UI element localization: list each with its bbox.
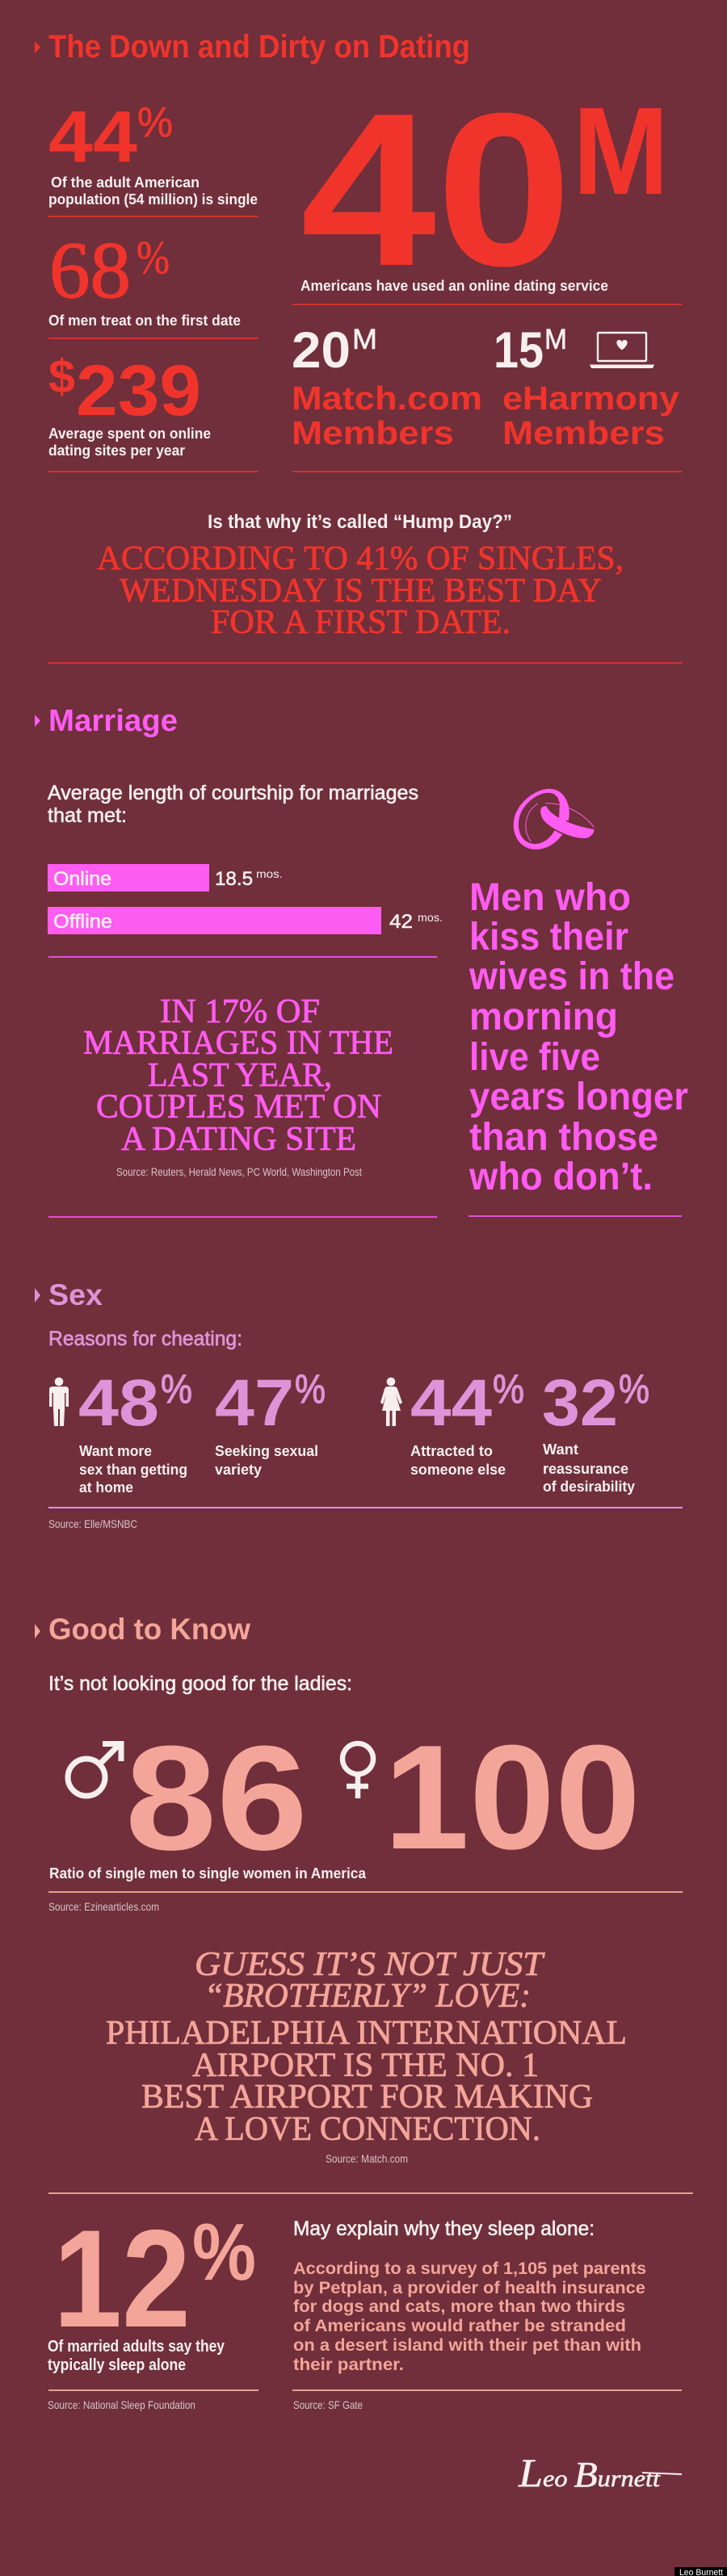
stat: 40 million: M — [573, 82, 669, 220]
stat: 44 percent single: population (54 million) is single — [48, 191, 258, 208]
callout: men who kiss their wives: years longer — [469, 1076, 688, 1118]
callout: wednesday best day: FOR A FIRST DATE. — [211, 604, 511, 641]
stat: 15 million eharmony: eHarmony — [502, 380, 679, 417]
heading: section title: The Down and Dirty on Dating — [48, 29, 470, 65]
stat: 20 million match.com: Match.com — [292, 380, 482, 417]
text: reasons for cheating: Reasons for cheating: — [48, 1328, 242, 1350]
stat: 12 percent sleep alone — [48, 2201, 256, 2374]
text: courtship intro: that met: — [48, 804, 127, 827]
panel: the down and dirty on dating — [35, 29, 683, 664]
callout: hump day question: Is that why it’s called “Hump Day?” — [208, 511, 512, 533]
stat: 12 percent sleep alone: 12 — [53, 2201, 191, 2356]
callout: 17 percent of marriages: A DATING SITE — [121, 1121, 356, 1158]
stat: 47 percent — [215, 1366, 326, 1478]
text: petplan survey: their partner. — [293, 2356, 404, 2374]
heading: good to know: Good to Know — [48, 1613, 250, 1646]
heading: marriage: Marriage — [48, 704, 178, 738]
stat: 47 percent: Seeking sexual — [215, 1443, 318, 1459]
stat: 32 percent: Want — [543, 1441, 578, 1458]
text: petplan survey: of Americans would rather be stranded — [293, 2317, 626, 2335]
arrow: section marker — [35, 715, 40, 727]
bar chart: courtship length: Online — [53, 868, 111, 890]
stat: 15 million eharmony: M — [544, 324, 567, 355]
stat: 100 women: 100 — [384, 1714, 641, 1880]
icon: wedding rings — [514, 789, 595, 850]
source: marriage: Source: Reuters, Herald News, PC World, Washington Post — [116, 1165, 362, 1178]
callout: men who kiss their wives: wives in the — [469, 955, 674, 998]
icon: male symbol — [68, 1744, 121, 1796]
stat: 44 percent single: % — [137, 99, 173, 146]
stat: 40 million: 40 — [300, 69, 572, 312]
callout: men who kiss their wives: morning — [469, 996, 618, 1038]
source: sex: Source: Elle/MSNBC — [48, 1517, 137, 1530]
stat: 44 percent: Attracted to — [410, 1443, 493, 1459]
callout: wednesday best day: WEDNESDAY IS THE BEST DAY — [120, 573, 602, 610]
stat: 47 percent: 47 — [215, 1366, 294, 1440]
arrow: section marker — [35, 41, 40, 53]
stat: 12 percent sleep alone: Of married adults say they — [48, 2338, 225, 2356]
callout: philadelphia airport: “BROTHERLY” LOVE: — [204, 1978, 531, 2015]
stat: 239 dollars per year — [48, 350, 211, 459]
stat: 68 percent treat — [48, 225, 241, 329]
icon: woman — [380, 1378, 402, 1426]
stat: 20 million match.com: 20 — [292, 322, 351, 379]
callout: philadelphia airport: BEST AIRPORT FOR MAKING — [141, 2079, 593, 2116]
callout: philadelphia airport: AIRPORT IS THE NO. 1 — [192, 2047, 539, 2084]
callout: 17 percent of marriages: IN 17% OF — [160, 993, 320, 1030]
stat: 47 percent: variety — [215, 1462, 262, 1478]
stat: 15 million eharmony — [494, 322, 679, 451]
text: may explain heading: May explain why they sleep alone: — [293, 2217, 595, 2240]
callout: philadelphia airport — [106, 1946, 627, 2148]
stat: 44 percent: % — [493, 1366, 524, 1412]
stat: 68 percent treat: Of men treat on the first date — [48, 313, 241, 329]
callout: 17 percent of marriages: COUPLES MET ON — [96, 1089, 381, 1126]
stat: 20 million match.com: Members — [292, 414, 454, 451]
stat: 48 percent: at home — [79, 1479, 133, 1496]
source: match.com: Source: Match.com — [326, 2152, 408, 2165]
bar chart: courtship length: Offline — [53, 911, 112, 933]
bar chart: courtship length — [48, 864, 443, 934]
callout: 17 percent of marriages — [83, 993, 393, 1158]
bar chart: courtship length: mos. — [418, 911, 443, 924]
icon: man — [49, 1378, 69, 1426]
callout: 17 percent of marriages: LAST YEAR, — [148, 1057, 332, 1094]
text: petplan survey: on a desert island with their pet than with — [293, 2336, 641, 2355]
stat: 68 percent treat: 68 — [49, 225, 131, 315]
stat: 15 million eharmony: Members — [502, 414, 665, 451]
stat: 40 million: Americans have used an online dating service — [300, 278, 608, 294]
stat: 44 percent single: Of the adult American — [51, 174, 200, 191]
callout: wednesday best day — [97, 540, 624, 641]
text: petplan survey: for dogs and cats, more than two thirds — [293, 2297, 625, 2316]
bar chart: courtship length: mos. — [256, 867, 283, 880]
stat: 239 dollars per year: Average spent on online — [48, 426, 211, 442]
logo: leo burnett signature: Leo Burnett — [518, 2450, 661, 2495]
stat: 44 percent — [410, 1366, 524, 1478]
source: ezinearticles: Source: Ezinearticles.com — [48, 1900, 159, 1913]
callout: wednesday best day: ACCORDING TO 41% OF SINGLES, — [97, 540, 624, 577]
text: petplan survey — [293, 2259, 646, 2374]
stat: 86 men: 86 — [125, 1714, 308, 1881]
stat: 40 million — [300, 69, 669, 312]
arrow: section marker — [35, 1288, 40, 1303]
icon: laptop with heart — [590, 333, 654, 368]
stat: 44 percent single — [48, 97, 258, 208]
callout: men who kiss their wives — [469, 876, 688, 1198]
callout: men who kiss their wives: Men who — [469, 876, 631, 919]
bar chart: courtship length: 18.5 — [215, 868, 253, 890]
source: sf gate: Source: SF Gate — [293, 2398, 363, 2411]
stat: 48 percent — [78, 1366, 192, 1496]
panel: marriage — [35, 704, 688, 1218]
arrow: section marker — [35, 1624, 40, 1638]
stat: 20 million match.com — [292, 322, 482, 451]
stat: 12 percent sleep alone: typically sleep alone — [48, 2356, 186, 2374]
panel: sex — [35, 1278, 683, 1530]
stat: 239 dollars per year: $ — [48, 350, 75, 403]
stat: 44 percent: 44 — [410, 1366, 492, 1440]
heading: sex: Sex — [48, 1278, 103, 1311]
text: courtship intro: Average length of courtship for marriages — [48, 782, 418, 804]
callout: men who kiss their wives: who don’t. — [469, 1156, 653, 1198]
callout: philadelphia airport: PHILADELPHIA INTERNATIONAL — [106, 2015, 627, 2052]
stat: 44 percent: someone else — [410, 1462, 506, 1478]
callout: men who kiss their wives: live five — [469, 1036, 600, 1079]
stat: 48 percent: Want more — [79, 1443, 152, 1459]
stat: 44 percent single: 44 — [48, 97, 137, 178]
stat: 20 million match.com: M — [352, 324, 377, 355]
callout: 17 percent of marriages: MARRIAGES IN THE — [83, 1025, 393, 1062]
text: petplan survey: According to a survey of 1,105 pet parents — [293, 2259, 646, 2278]
stat: 48 percent: % — [161, 1366, 192, 1412]
stat: 239 dollars per year: dating sites per year — [48, 443, 185, 459]
callout: philadelphia airport: GUESS IT’S NOT JUST — [195, 1946, 545, 1983]
callout: philadelphia airport: A LOVE CONNECTION. — [195, 2111, 540, 2148]
stat: 32 percent — [542, 1366, 649, 1495]
text: ratio caption: Ratio of single men to single women in America — [49, 1865, 367, 1882]
callout: men who kiss their wives: kiss their — [469, 916, 628, 959]
text: courtship intro — [48, 782, 418, 827]
stat: 15 million eharmony: 15 — [494, 322, 544, 379]
source: national sleep foundation: Source: National Sleep Foundation — [48, 2398, 195, 2411]
bar chart: courtship length: 42 — [389, 911, 413, 933]
stat: 32 percent: of desirability — [543, 1479, 635, 1495]
stat: 32 percent: reassurance — [543, 1461, 628, 1477]
stat: 12 percent sleep alone: % — [192, 2207, 256, 2297]
stat: 239 dollars per year: 239 — [76, 350, 201, 430]
stat: 32 percent: % — [619, 1366, 649, 1412]
panel: good to know — [35, 1613, 693, 2411]
stat: 48 percent: 48 — [78, 1366, 159, 1440]
stat: 32 percent: 32 — [542, 1366, 618, 1440]
icon: female symbol — [342, 1743, 373, 1798]
stat: 47 percent: % — [295, 1366, 326, 1412]
stat: 68 percent treat: % — [137, 231, 170, 283]
text: petplan survey: by Petplan, a provider of health insurance — [293, 2279, 645, 2297]
text: ladies intro: It’s not looking good for the ladies: — [48, 1672, 352, 1695]
callout: men who kiss their wives: than those — [469, 1116, 658, 1159]
stat: 48 percent: sex than getting — [79, 1462, 187, 1478]
